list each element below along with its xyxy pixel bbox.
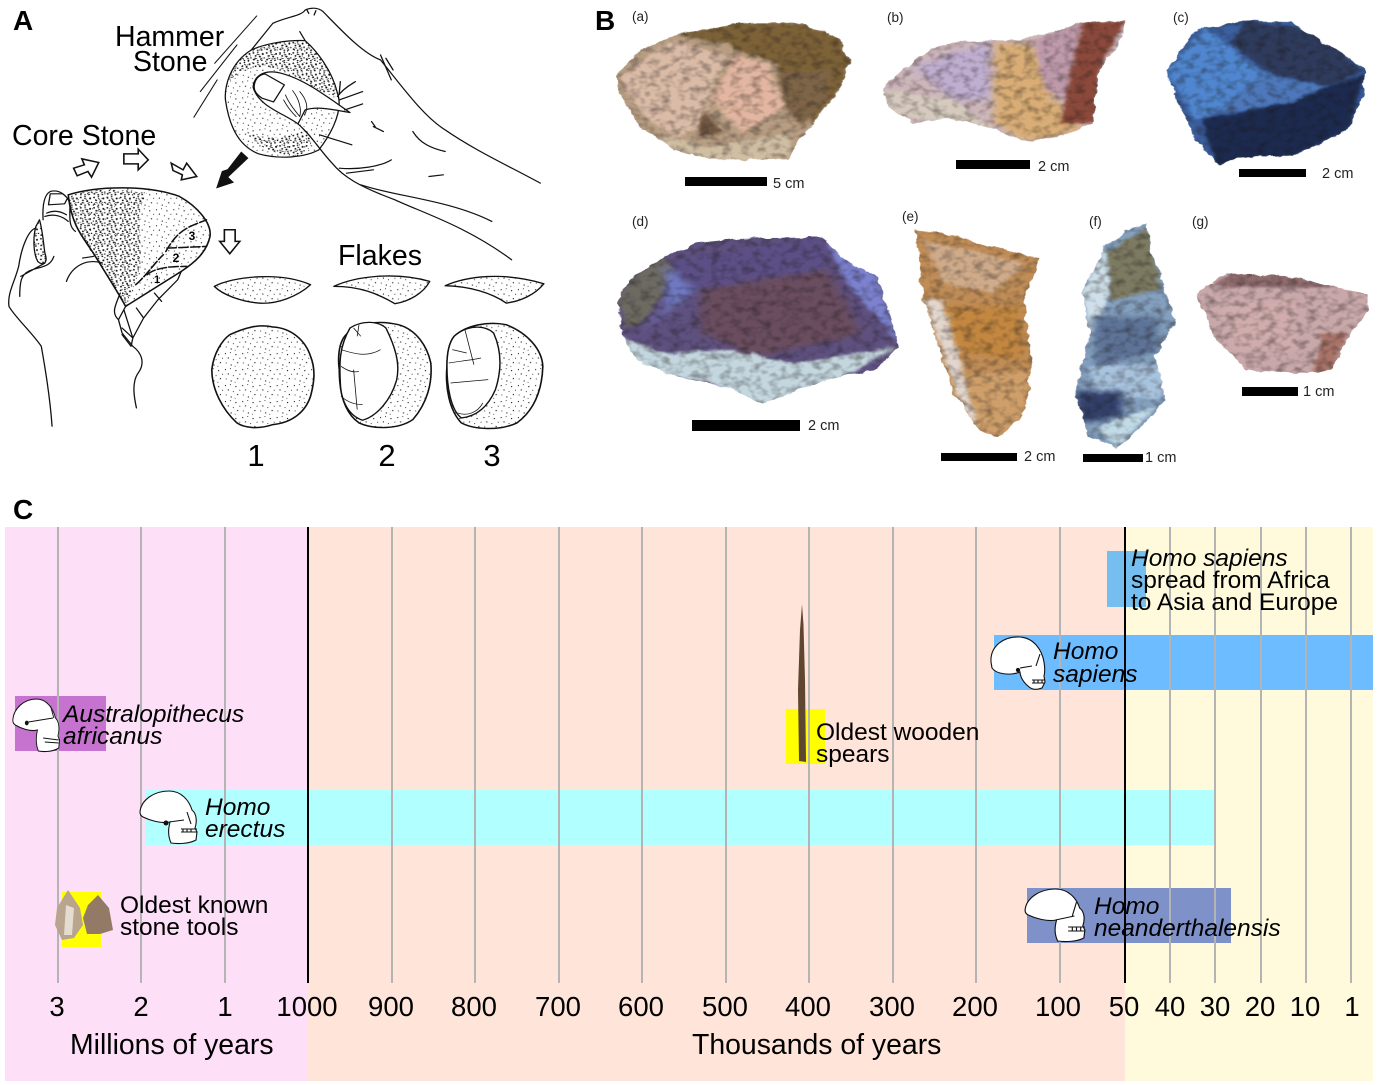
axis tick numbers: 20 [1245,991,1275,1022]
flake numbers [247,438,501,473]
label: Australopithecus africanus: Australopithecus [61,701,244,728]
core flake numbers: 1 [154,274,160,286]
label: Homo erectus: Homo [205,794,270,821]
photo labels a to g: (f) [1089,214,1102,229]
photo labels a to g: (g) [1192,214,1208,229]
axis tick numbers: 1 [217,991,233,1022]
photo labels a to g: (e) [902,209,918,224]
label: Core Stone: Core Stone [12,120,156,152]
scale bars [685,160,1306,462]
stone (g) [1193,270,1370,375]
label: Hammer Stone: Stone [133,46,207,78]
skull: Homo erectus [140,791,197,844]
stone (e) [913,227,1044,440]
label: Homo neanderthalensis: Homo [1094,893,1159,920]
panel C: human evolution timeline [5,527,1373,1081]
flake numbers: 2 [378,438,396,473]
stone (f) [1074,224,1176,449]
axis tick numbers: 40 [1155,991,1185,1022]
label: Hammer Stone [115,21,225,78]
photo labels a to g: (b) [887,10,904,25]
photo labels a to g: (a) [632,9,648,24]
axis tick numbers: 100 [1035,991,1081,1022]
label: Homo erectus: erectus [205,816,285,843]
axis tick numbers: 1 [1344,991,1360,1022]
stone (a) [610,20,858,163]
label: Australopithecus africanus: africanus [63,723,162,750]
label: oldest known stone tools: stone tools [120,914,238,941]
core flake numbers: 2 [173,251,180,265]
scale bar labels [773,159,1353,466]
label: Hammer Stone: Hammer [115,21,225,53]
photo labels a to g: (d) [632,214,648,229]
scale divider lines [308,527,1125,983]
flake numbers: 3 [483,438,501,473]
skull: Australopithecus [13,699,60,752]
axis tick numbers: 30 [1200,991,1230,1022]
axis title: millions of years: Millions of years [70,1029,274,1061]
label: Homo sapiens spread: Homo sapiens [1131,545,1288,572]
icon: solid black arrow [216,152,248,188]
label: oldest known stone tools: Oldest known [120,892,268,919]
stone (b) [878,18,1130,145]
bar: Australopithecus africanus [15,696,106,751]
core flake numbers: 3 [189,229,196,243]
photo labels a to g: (c) [1173,10,1189,25]
flake numbers: 1 [247,438,265,473]
species and event labels [61,545,1338,942]
bar: Homo sapiens spread [1107,551,1146,607]
stone (c) [1161,18,1368,168]
stone (d) [615,235,903,405]
scale bar labels: 5 cm [773,176,804,192]
axis tick numbers: 3 [49,991,65,1022]
drawing: hand with core stone [9,188,210,426]
drawing: hand with hammer stone [194,8,540,260]
bar: Homo neanderthalensis [1027,888,1231,943]
panel letter A: A [13,5,33,36]
timeline background: thousands of years [308,527,1125,1081]
icon: wooden spear [798,604,806,762]
axis tick numbers: 300 [869,991,915,1022]
panel letter C: C [13,494,33,525]
grid lines [58,527,1351,983]
icons: white direction arrows [74,149,240,254]
core flake numbers [154,229,196,286]
axis tick numbers: 400 [785,991,831,1022]
scale bar labels: 2 cm [808,418,839,434]
axis tick numbers: 600 [618,991,664,1022]
scale bar labels: 2 cm [1038,159,1069,175]
photo labels a to g [632,9,1208,229]
skull: Homo sapiens [991,637,1045,689]
axis title: thousands of years: Thousands of years [692,1029,941,1061]
scale bar labels: 1 cm [1145,450,1176,466]
axis tick numbers: 50 [1109,991,1139,1022]
label: Flakes: Flakes [338,240,422,272]
artefact photos a to g [610,18,1370,452]
panel B: photographs of stone tools [595,5,1370,466]
timeline background: recent thousands [1125,527,1373,1081]
scale bar labels: 2 cm [1322,166,1353,182]
label: oldest wooden spears: spears [816,741,890,768]
bar: Homo sapiens [994,635,1373,690]
axis tick numbers: 2 [133,991,149,1022]
axis tick numbers: 700 [535,991,581,1022]
axis tick numbers: 900 [368,991,414,1022]
label: Homo sapiens spread: to Asia and Europe [1131,589,1338,616]
axis tick numbers: 800 [451,991,497,1022]
bar: Homo erectus [145,790,1215,845]
label: Homo sapiens: sapiens [1053,661,1137,688]
label: Homo sapiens: Homo [1053,638,1118,665]
label: oldest wooden spears: Oldest wooden [816,719,979,746]
axis tick numbers: 1000 [276,991,338,1022]
axis tick numbers: 10 [1290,991,1320,1022]
scale bar labels: 2 cm [1024,449,1055,465]
label: Homo neanderthalensis: neanderthalensis [1094,915,1281,942]
axis tick numbers: 200 [952,991,998,1022]
panel letter B: B [595,5,615,36]
scale bar labels: 1 cm [1303,384,1334,400]
bar: oldest stone tools [62,892,101,947]
axis tick numbers: 500 [702,991,748,1022]
drawing: three flakes side and face views [212,276,544,429]
panel A: stone knapping illustration [9,5,544,473]
bar: oldest wooden spears [786,709,825,764]
icon: oldest stone tools [55,890,113,940]
label: Homo sapiens spread: spread from Africa [1131,567,1330,594]
skull: Homo neanderthalensis [1025,889,1085,942]
axis tick numbers [49,991,1360,1022]
timeline background: millions of years [5,527,308,1081]
